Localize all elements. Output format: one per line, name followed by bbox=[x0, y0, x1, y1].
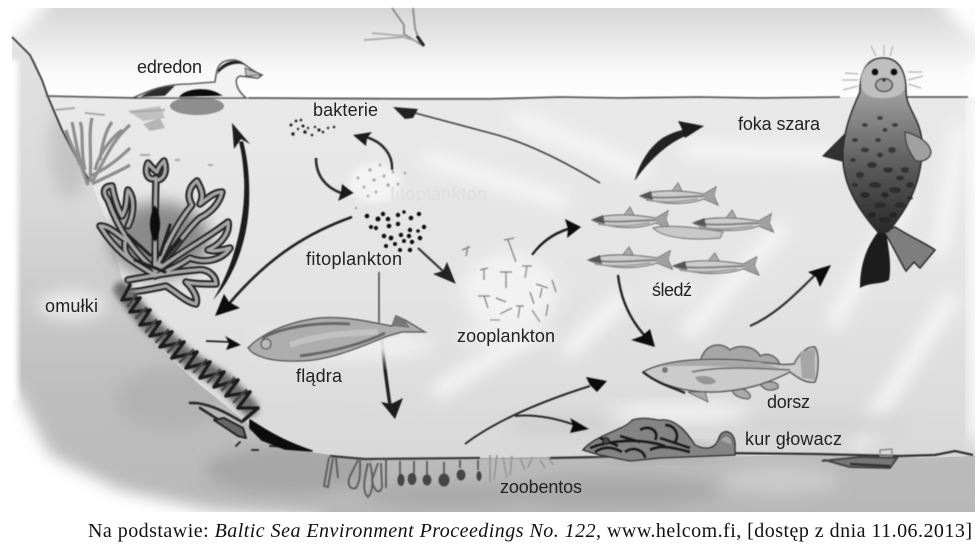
icon: eider duck bbox=[128, 60, 262, 131]
herring shoal bbox=[588, 183, 773, 275]
label: śledź: śledź bbox=[652, 280, 692, 300]
ghost label: fitoplankton bbox=[390, 184, 487, 204]
arrow: zoobenthos to cod bbox=[465, 377, 607, 444]
icon: sculpin bbox=[583, 418, 735, 461]
arrow: zoobenthos to sculpin bbox=[515, 415, 589, 433]
label: foka szara: foka szara bbox=[738, 114, 821, 134]
bacteria dots bbox=[290, 119, 335, 136]
arrow: mussels to flounder bbox=[206, 336, 241, 350]
arrow: herring to bacteria bbox=[393, 107, 600, 183]
icon: herring 4 bbox=[653, 226, 723, 239]
labels bbox=[45, 57, 842, 497]
label: flądra: flądra bbox=[296, 366, 343, 386]
label: bakterie: bakterie bbox=[313, 100, 378, 120]
shoreline and water surface bbox=[12, 37, 973, 459]
icon: herring 1 bbox=[640, 183, 718, 205]
label: zoobentos: zoobentos bbox=[500, 477, 582, 497]
icon: herring 2 bbox=[592, 207, 670, 229]
label: zooplankton: zooplankton bbox=[457, 326, 555, 346]
icon: herring 6 bbox=[673, 253, 759, 275]
icon: herring 3 bbox=[693, 210, 773, 232]
icon: cod bbox=[610, 345, 818, 421]
label: dorsz: dorsz bbox=[767, 392, 810, 412]
label: omułki: omułki bbox=[45, 296, 98, 316]
source caption: Na podstawie: Baltic Sea Environment Proceedings No. 122, www.helcom.fi, [dostęp z dnia 11.06.2013] bbox=[88, 520, 972, 542]
bird: diving tern bbox=[364, 8, 424, 46]
icon: small flatfish on seabed bbox=[822, 449, 897, 468]
icon: grey seal bbox=[823, 45, 935, 288]
label: fitoplankton: fitoplankton bbox=[306, 249, 402, 269]
arrow: phytoplankton to zooplankton bbox=[418, 248, 456, 284]
arrow: phytoplankton to mussels bbox=[215, 217, 352, 316]
icon: mussel bed on slope bbox=[122, 285, 312, 451]
icon: bladderwrack seaweed bbox=[100, 161, 230, 304]
label: kur głowacz: kur głowacz bbox=[745, 429, 842, 449]
icon: grass seaweed bbox=[55, 108, 213, 185]
arrow: bacteria to phytoplankton bbox=[316, 158, 354, 201]
faint phytoplankton cloud bbox=[349, 163, 406, 209]
arrow: herring to grey seal bbox=[635, 121, 704, 180]
arrow: water to duck bbox=[213, 123, 250, 300]
label: edredon: edredon bbox=[137, 57, 202, 77]
icon: herring 5 bbox=[588, 247, 672, 269]
phytoplankton dots bbox=[365, 210, 426, 252]
label halos bbox=[38, 283, 696, 346]
arrow: zooplankton to herring bbox=[532, 219, 581, 255]
arrow: herring to cod bbox=[618, 275, 655, 347]
zoobenthos organisms bbox=[324, 455, 553, 497]
arrow: phytoplankton to seabed bbox=[379, 272, 403, 419]
arrow: phytoplankton to bacteria bbox=[353, 132, 392, 170]
arrow: cod to grey seal bbox=[750, 265, 831, 326]
zooplankton cloud bbox=[462, 238, 558, 332]
icon: flounder bbox=[248, 316, 435, 361]
